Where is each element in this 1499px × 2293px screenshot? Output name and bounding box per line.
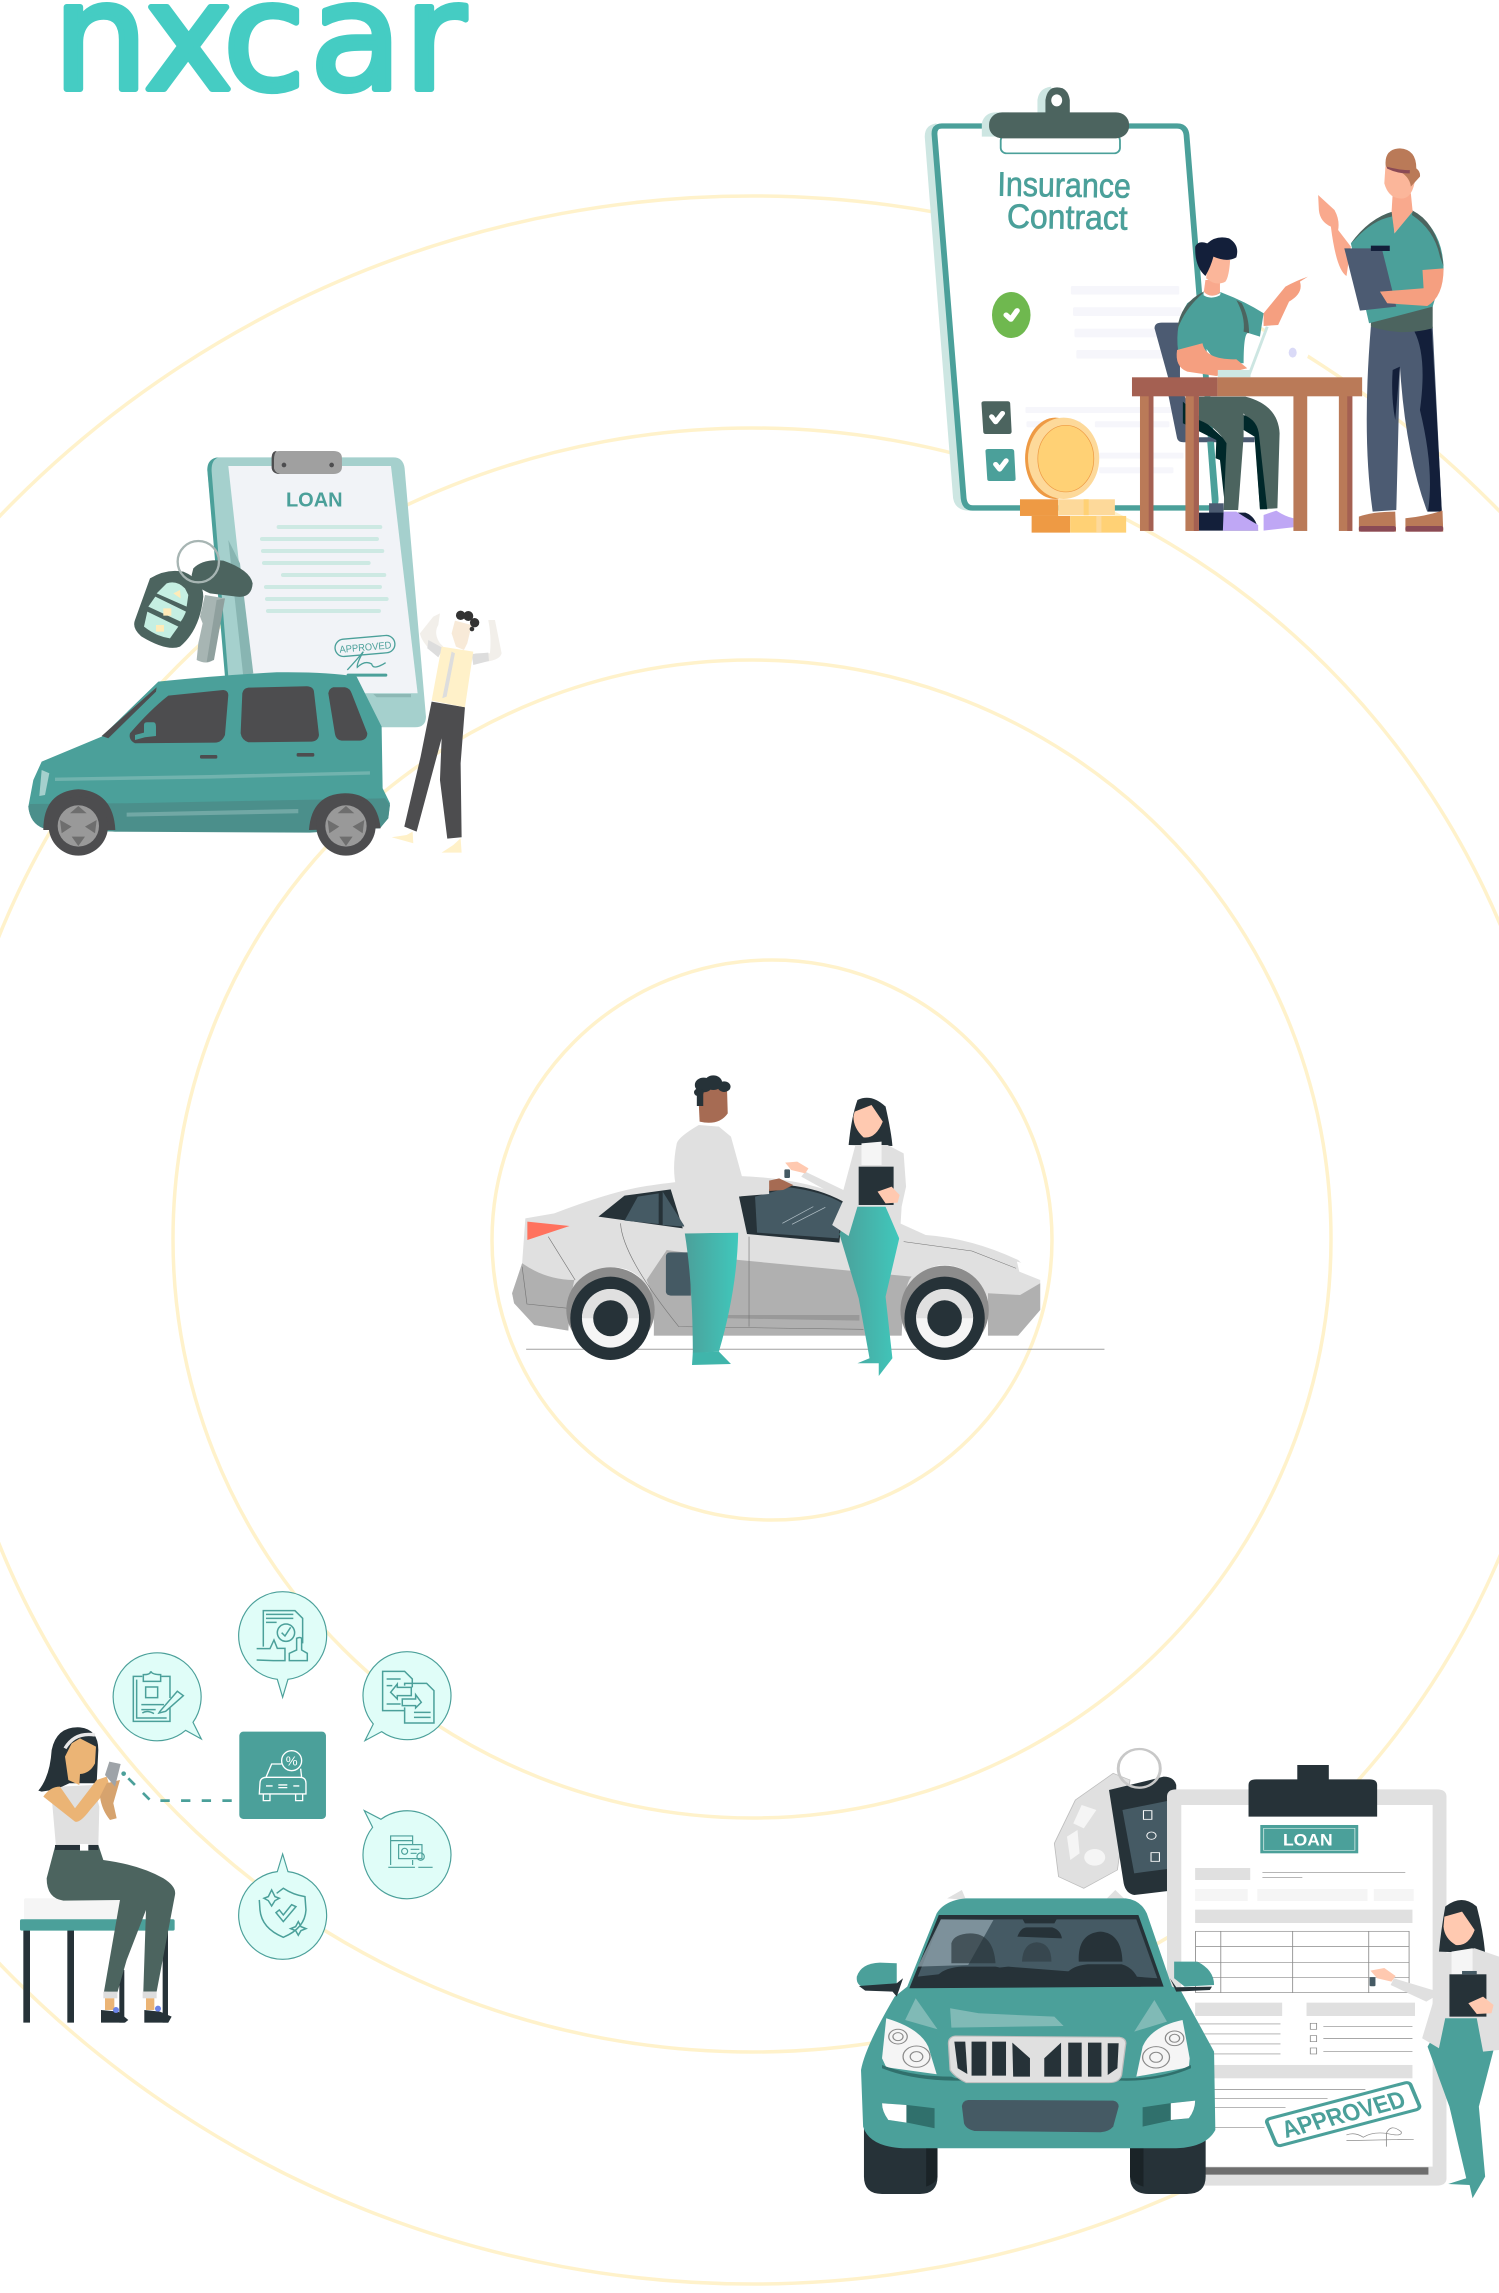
loan clipboard xyxy=(207,451,426,727)
hatchback car xyxy=(28,672,390,856)
central car discount tile: % xyxy=(286,1754,298,1769)
bubble: digital id xyxy=(363,1811,451,1899)
coins xyxy=(1020,418,1126,533)
approved stamp xyxy=(334,635,396,677)
standing person xyxy=(1318,148,1444,532)
form blocks and table xyxy=(1195,1868,1415,2147)
illustration: insurance contract xyxy=(925,87,1444,533)
woman handing keys xyxy=(784,1098,906,1376)
silver car xyxy=(512,1176,1040,1360)
teal suv xyxy=(857,1890,1215,2194)
woman presenting xyxy=(1370,1900,1499,2198)
desk xyxy=(1132,377,1362,531)
illustration: loan options with chat bubbles xyxy=(20,1592,451,2023)
bubble: approved document xyxy=(239,1592,327,1697)
loan label xyxy=(1260,1825,1358,1853)
seated person xyxy=(1155,237,1318,531)
central car discount tile xyxy=(239,1732,326,1819)
bubble: insurance shield xyxy=(239,1854,327,1959)
dashed connector xyxy=(121,1771,236,1801)
approved stamp xyxy=(1266,2082,1421,2146)
approval check and text lines xyxy=(981,286,1185,481)
clipboard xyxy=(925,87,1216,511)
loan clipboard xyxy=(1167,1765,1446,2186)
ground line xyxy=(526,1348,1104,1351)
bubble: application form xyxy=(113,1653,201,1741)
car keys xyxy=(134,541,253,662)
bubble: document exchange xyxy=(363,1652,451,1741)
heading: insurance contract xyxy=(997,165,1131,237)
illustration: central car handover xyxy=(512,1075,1104,1376)
man receiving keys xyxy=(674,1075,793,1365)
heading: insurance contract: Insurance xyxy=(997,165,1131,205)
heading: loan: LOAN xyxy=(286,489,343,511)
document lines xyxy=(260,525,389,613)
loan label: LOAN xyxy=(1283,1831,1333,1850)
approved stamp: APPROVED xyxy=(1277,2085,1410,2143)
cheering man xyxy=(392,611,502,853)
woman on stool xyxy=(20,1727,175,2023)
key fob with car keychain xyxy=(1054,1749,1176,1895)
heading: insurance contract: Contract xyxy=(1007,197,1128,237)
approved stamp: APPROVED xyxy=(339,640,392,656)
illustration: loan clipboard with hatchback xyxy=(28,451,502,856)
illustration: suv loan approval xyxy=(857,1749,1499,2198)
